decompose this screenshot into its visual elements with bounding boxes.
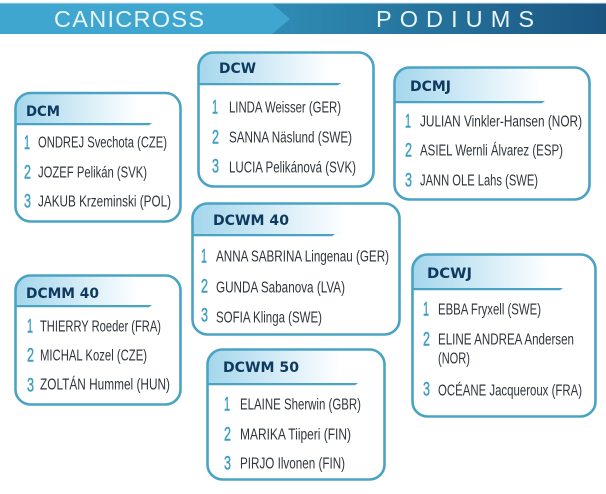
results list: 1 <box>405 110 411 132</box>
results list: 3 <box>405 170 412 192</box>
results list <box>201 246 389 326</box>
results list: 1 <box>24 132 30 154</box>
results list: GUNDA Sabanova (LVA) <box>216 280 345 296</box>
results list: 3 <box>212 156 219 178</box>
results list: LUCIA Pelikánová (SVK) <box>229 160 356 176</box>
results list: 2 <box>27 344 34 366</box>
banner left arrow segment <box>0 4 290 34</box>
results list: LINDA Weisser (GER) <box>229 100 341 116</box>
heading: DCW <box>219 61 256 77</box>
results list: MARIKA Tiiperi (FIN) <box>240 426 351 444</box>
heading: DCMJ <box>410 79 451 95</box>
results list: 1 <box>224 394 230 416</box>
results list: 1 <box>212 96 218 118</box>
results list: 3 <box>24 190 31 212</box>
results list: PIRJO Ilvonen (FIN) <box>240 456 345 472</box>
heading: DCWM 40 <box>213 213 289 229</box>
banner <box>0 2 606 34</box>
results list <box>405 110 582 192</box>
heading: DCWJ <box>427 266 472 282</box>
results list: ZOLTÁN Hummel (HUN) <box>40 376 170 394</box>
heading: DCMM 40 <box>26 286 99 302</box>
results list: EBBA Fryxell (SWE) <box>438 302 541 318</box>
results list: 2 <box>24 162 31 184</box>
results list: JAKUB Krzeminski (POL) <box>38 194 171 210</box>
results list <box>423 298 582 400</box>
title: canicross: CANICROSS <box>54 6 204 32</box>
panel: DCWJ <box>412 254 596 416</box>
results list: ONDREJ Svechota (CZE) <box>38 134 167 152</box>
panel: DCWM 40 <box>192 204 400 334</box>
heading: DCWM 50 <box>223 360 299 376</box>
results list: SANNA Näslund (SWE) <box>229 130 352 146</box>
panel: DCMJ <box>394 68 590 200</box>
results list: 3 <box>224 452 231 474</box>
banner right segment <box>272 4 606 34</box>
results list: JOZEF Pelikán (SVK) <box>38 164 147 182</box>
results list: SOFIA Klinga (SWE) <box>216 310 322 326</box>
results list: 1 <box>423 298 429 320</box>
results list <box>212 96 356 178</box>
results list: 2 <box>224 424 231 446</box>
results list: 2 <box>423 328 430 350</box>
results list: 1 <box>201 246 207 268</box>
results list: THIERRY Roeder (FRA) <box>40 318 161 336</box>
results list: 1 <box>27 316 33 338</box>
results list: MICHAL Kozel (CZE) <box>40 348 147 364</box>
results list: 3 <box>423 378 430 400</box>
results list: (NOR) <box>438 350 470 368</box>
panel: DCM <box>15 93 181 222</box>
results list: 2 <box>405 140 412 162</box>
panel: DCMM 40 <box>15 275 181 404</box>
panel: DCW <box>198 52 374 186</box>
results list: 3 <box>201 304 208 326</box>
heading: DCM <box>26 104 60 120</box>
panel: DCWM 50 <box>207 349 385 480</box>
results list: 2 <box>201 276 208 298</box>
results list: JANN OLE Lahs (SWE) <box>420 172 538 190</box>
title: podiums: PODIUMS <box>376 6 534 32</box>
results list <box>24 132 171 212</box>
results list <box>27 316 170 396</box>
results list: ANNA SABRINA Lingenau (GER) <box>216 248 389 266</box>
results list: 3 <box>27 374 34 396</box>
results list: ELAINE Sherwin (GBR) <box>240 396 361 414</box>
results list: 2 <box>212 126 219 148</box>
results list <box>224 394 361 474</box>
